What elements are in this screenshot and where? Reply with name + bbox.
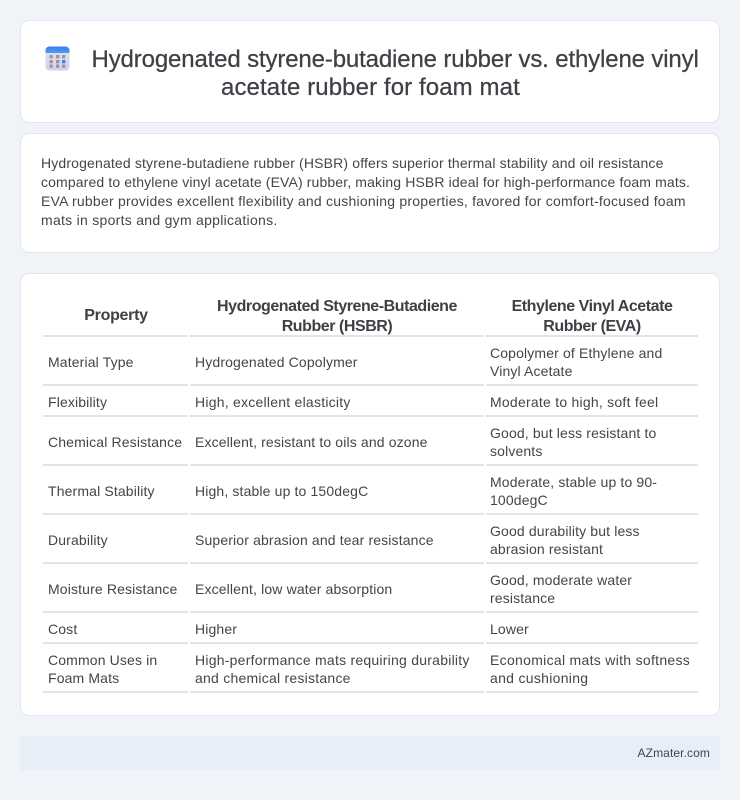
intro paragraph: mats in sports and gym applications. xyxy=(41,212,278,228)
row: Durability: Good durability but less xyxy=(490,523,640,539)
row: Common Uses in Foam Mats: Economical mats with softness xyxy=(490,652,690,668)
row: Thermal Stability xyxy=(48,474,657,508)
intro paragraph xyxy=(41,155,690,228)
row: Moisture Resistance: Excellent, low water absorption xyxy=(195,581,392,597)
row: Thermal Stability: Thermal Stability xyxy=(48,483,155,499)
row: Chemical Resistance: solvents xyxy=(490,443,542,459)
intro paragraph: compared to ethylene vinyl acetate (EVA) rubber, making HSBR ideal for high-performance foam mats. xyxy=(41,174,690,190)
row: Flexibility: High, excellent elasticity xyxy=(195,394,351,410)
row: Material Type: Hydrogenated Copolymer xyxy=(195,354,358,370)
header panel xyxy=(20,20,720,123)
column header: EVA: Rubber (EVA) xyxy=(543,318,641,335)
row: Moisture Resistance: Moisture Resistance xyxy=(48,581,178,597)
footer brand: AZmater.com xyxy=(638,746,710,760)
title: Hydrogenated styrene-butadiene rubber vs. ethylene vinyl xyxy=(92,46,699,73)
row: Thermal Stability: 100degC xyxy=(490,492,548,508)
row: Durability: Superior abrasion and tear resistance xyxy=(195,532,434,548)
column header: HSBR xyxy=(217,298,457,335)
column header: HSBR: Rubber (HSBR) xyxy=(282,318,392,335)
row: Cost: Cost xyxy=(48,621,77,637)
row: Chemical Resistance: Chemical Resistance xyxy=(48,434,182,450)
column header: HSBR: Hydrogenated Styrene-Butadiene xyxy=(217,298,457,315)
row: Material Type: Copolymer of Ethylene and xyxy=(490,345,662,361)
row: Cost: Lower xyxy=(490,621,529,637)
row: Common Uses in Foam Mats: Foam Mats xyxy=(48,670,119,686)
column header: EVA xyxy=(512,298,672,335)
row: Moisture Resistance: Good, moderate water xyxy=(490,572,632,588)
row: Thermal Stability: Moderate, stable up to 90- xyxy=(490,474,657,490)
row: Chemical Resistance: Good, but less resistant to xyxy=(490,425,656,441)
row: Common Uses in Foam Mats: Common Uses in xyxy=(48,652,157,668)
row: Material Type xyxy=(48,345,662,379)
row: Durability: Durability xyxy=(48,532,108,548)
intro paragraph: Hydrogenated styrene-butadiene rubber (HSBR) offers superior thermal stability and oil resistance xyxy=(41,155,664,171)
row: Durability: abrasion resistant xyxy=(490,541,603,557)
row: Chemical Resistance xyxy=(48,425,656,459)
row: Durability xyxy=(48,523,640,557)
title xyxy=(92,46,699,101)
row: Chemical Resistance: Excellent, resistant to oils and ozone xyxy=(195,434,428,450)
row: Moisture Resistance xyxy=(48,572,632,606)
row: Common Uses in Foam Mats: High-performance mats requiring durability xyxy=(195,652,470,668)
footer bar xyxy=(20,736,720,770)
comparison table panel xyxy=(20,273,720,716)
intro paragraph: EVA rubber provides excellent flexibility and cushioning properties, favored for comfort-focused foam xyxy=(41,193,686,209)
row: Flexibility: Moderate to high, soft feel xyxy=(490,394,658,410)
row: Moisture Resistance: resistance xyxy=(490,590,555,606)
row: Cost: Higher xyxy=(195,621,237,637)
row: Common Uses in Foam Mats: and chemical resistance xyxy=(195,670,351,686)
row: Material Type: Vinyl Acetate xyxy=(490,363,573,379)
row: Flexibility: Flexibility xyxy=(48,394,107,410)
icon: calendar xyxy=(46,46,70,70)
row: Common Uses in Foam Mats xyxy=(48,652,690,686)
row: Material Type: Material Type xyxy=(48,354,134,370)
row: Cost xyxy=(48,621,529,637)
row: Thermal Stability: High, stable up to 150degC xyxy=(195,483,368,499)
title: acetate rubber for foam mat xyxy=(221,74,520,101)
column header: EVA: Ethylene Vinyl Acetate xyxy=(512,298,672,315)
intro text panel xyxy=(20,133,720,253)
row: Common Uses in Foam Mats: and cushioning xyxy=(490,670,588,686)
row: Flexibility xyxy=(48,394,658,410)
column header: Property: Property xyxy=(84,307,148,324)
